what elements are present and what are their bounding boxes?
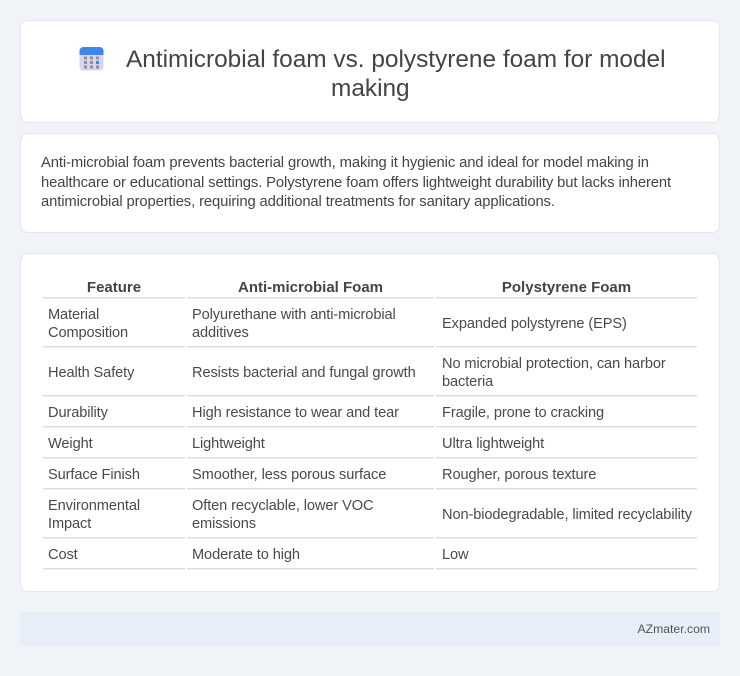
- row: Weight: Weight: [48, 436, 93, 452]
- text: making: [331, 75, 410, 102]
- summary text: Anti-microbial foam prevents bacterial growth, making it hygienic and ideal for model making in: [41, 155, 649, 171]
- cell: Lightweight: Lightweight: [192, 436, 265, 452]
- cell: No microbial protection: bacteria: [442, 374, 493, 390]
- cell: Ultra lightweight: Ultra lightweight: [442, 436, 544, 452]
- row: Material Composition: Material: [48, 307, 99, 323]
- row: Health Safety: Health Safety: [48, 365, 134, 381]
- cell: Often recyclable: [192, 498, 373, 532]
- cell: Low: Low: [442, 547, 468, 563]
- title: [126, 46, 666, 102]
- cell: Often recyclable: Often recyclable, lower VOC: [192, 498, 373, 514]
- summary panel: [20, 133, 720, 233]
- cell: Polyurethane: Polyurethane with anti-microbial: [192, 307, 396, 323]
- row: Environmental Impact: [48, 498, 140, 532]
- row: Environmental Impact: Environmental: [48, 498, 140, 514]
- table header: Anti-microbial Foam: Anti-microbial Foam: [238, 279, 383, 296]
- cell: Expanded polystyrene: Expanded polystyrene (EPS): [442, 316, 627, 332]
- cell: High resistance: High resistance to wear and tear: [192, 405, 399, 421]
- footer bar: [20, 612, 720, 646]
- row: Environmental Impact: Impact: [48, 516, 91, 532]
- icon: calendar: [80, 47, 104, 70]
- cell: Fragile: Fragile, prone to cracking: [442, 405, 604, 421]
- summary text: [41, 155, 671, 210]
- summary text: antimicrobial properties, requiring additional treatments for sanitary applications.: [41, 194, 555, 210]
- cell: Rougher: Rougher, porous texture: [442, 467, 596, 483]
- table header: Feature: Feature: [87, 279, 141, 296]
- cell: No microbial protection: [442, 356, 666, 390]
- cell: Often recyclable: emissions: [192, 516, 256, 532]
- comparison table panel: [20, 253, 720, 592]
- cell: No microbial protection: No microbial protection, can harbor: [442, 356, 666, 372]
- row: Material Composition: Composition: [48, 325, 128, 341]
- cell: Non-biodegradable: Non-biodegradable, limited recyclability: [442, 507, 692, 523]
- row: Cost: Cost: [48, 547, 78, 563]
- cell: Polyurethane: [192, 307, 396, 341]
- cell: Moderate to high: Moderate to high: [192, 547, 300, 563]
- row: Durability: Durability: [48, 405, 108, 421]
- summary text: healthcare or educational settings. Polystyrene foam offers lightweight durability but lacks inherent: [41, 174, 671, 190]
- title panel: [20, 20, 720, 123]
- table header: Polystyrene Foam: Polystyrene Foam: [502, 279, 631, 296]
- title: Antimicrobial foam vs. polystyrene foam for model: [126, 46, 666, 73]
- row: Material Composition: [48, 307, 128, 341]
- cell: Resists growth: Resists bacterial and fungal growth: [192, 365, 416, 381]
- footer brand: AZmater.com: [638, 622, 710, 636]
- row: Surface Finish: Surface Finish: [48, 467, 140, 483]
- cell: Smoother: Smoother, less porous surface: [192, 467, 386, 483]
- cell: Polyurethane: additives: [192, 325, 249, 341]
